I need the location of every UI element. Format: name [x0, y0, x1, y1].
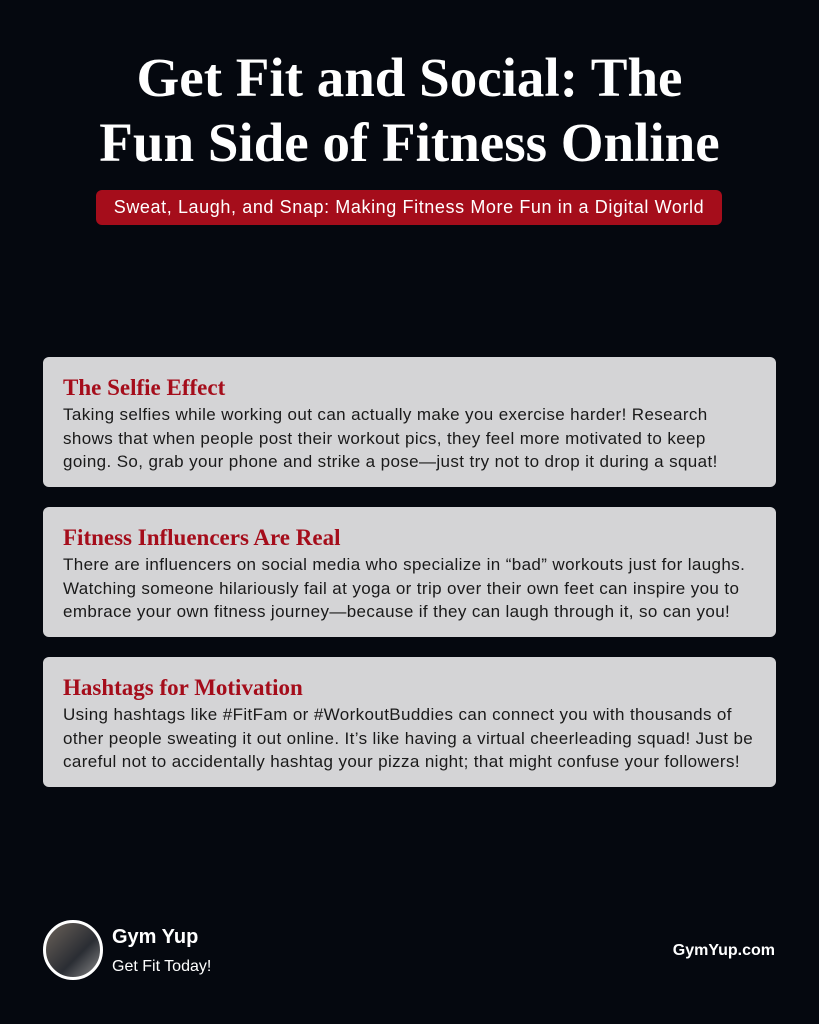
heading: Hashtags for Motivation: [63, 675, 303, 700]
text: Using hashtags like #FitFam or #WorkoutBuddies can connect you with thousands of: [63, 705, 732, 724]
text: shows that when people post their workout pics, they feel more motivated to keep: [63, 428, 706, 448]
text: Taking selfies while working out can actually make you exercise harder! Research: [63, 405, 708, 424]
text: careful not to accidentally hashtag your pizza night; that might confuse your followers!: [63, 752, 740, 771]
brand name: Gym Yup: [112, 926, 198, 948]
text: Watching someone hilariously fail at yoga or trip over their own feet can inspire you to: [63, 578, 739, 598]
panel: hashtags: [43, 657, 776, 787]
title: Fun Side of Fitness Online: [99, 112, 720, 173]
heading: Fitness Influencers Are Real: [63, 525, 340, 550]
icon: avatar: [43, 920, 103, 980]
tagline: Get Fit Today!: [112, 958, 211, 975]
text: [63, 705, 753, 771]
subtitle pill: Sweat, Laugh, and Snap: Making Fitness More Fun in a Digital World: [114, 197, 704, 217]
title: [99, 47, 720, 173]
website: GymYup.com: [673, 942, 775, 959]
text: [63, 555, 745, 621]
text: going. So, grab your phone and strike a pose—just try not to drop it during a squat!: [63, 452, 718, 471]
text: [63, 405, 718, 471]
text: other people sweating it out online. It’s like having a virtual cheerleading squad! Just be: [63, 728, 753, 748]
title: Get Fit and Social: The: [137, 47, 682, 108]
panel: influencers: [43, 507, 776, 637]
text: embrace your own fitness journey—because if they can laugh through it, so can you!: [63, 602, 730, 621]
heading: The Selfie Effect: [63, 375, 225, 400]
panel: selfie effect: [43, 357, 776, 487]
subtitle pill: [96, 190, 722, 225]
text: There are influencers on social media who specialize in “bad” workouts just for laughs.: [63, 555, 745, 574]
